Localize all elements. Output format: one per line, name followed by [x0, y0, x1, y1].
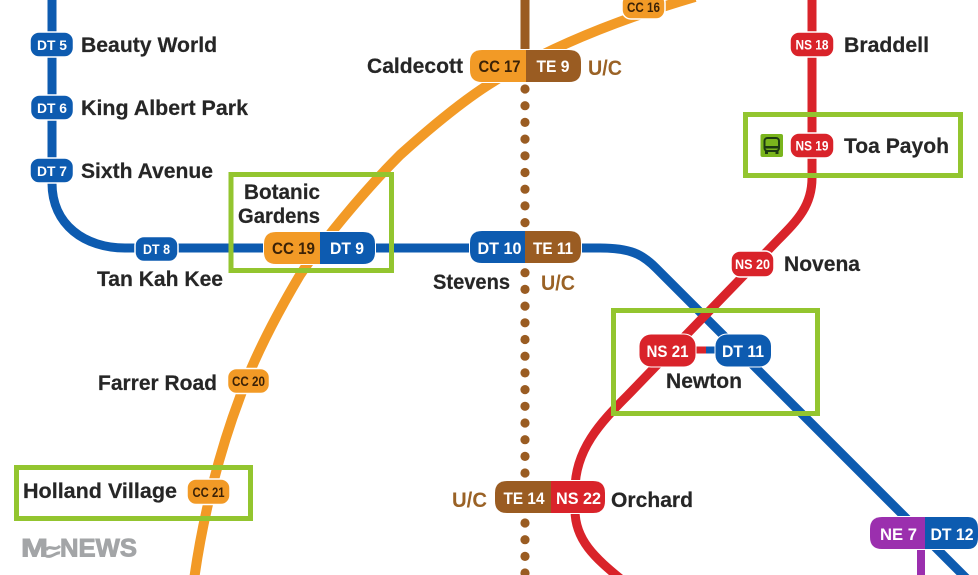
- station: Sixth Avenue: DT 7: [37, 163, 67, 179]
- station: Beauty World: [30, 32, 217, 57]
- station: Orchard: Orchard: [611, 489, 693, 512]
- highlight box: Toa Payoh: [746, 114, 960, 176]
- line: North-South (red): [575, 0, 812, 575]
- station: Caldecott: [367, 49, 622, 83]
- station: Orchard: NS 22: [556, 489, 601, 508]
- station: Orchard: [452, 480, 693, 514]
- station: Braddell: [790, 32, 929, 57]
- station: Stevens: DT 10: [478, 239, 522, 258]
- station: Beauty World: DT 5: [37, 37, 67, 53]
- station: Stevens: U/C: [541, 272, 575, 295]
- line: Thomson-East Coast (brown, solid): [520, 0, 530, 55]
- station: Botanic Gardens: Botanic: [244, 181, 320, 204]
- line: Circle (orange): [194, 0, 695, 575]
- station: Sixth Avenue: Sixth Avenue: [81, 160, 213, 183]
- station: Farrer Road: Farrer Road: [98, 372, 217, 395]
- station: Farrer Road: [98, 368, 270, 395]
- station: Beauty World: Beauty World: [81, 34, 217, 57]
- station: Caldecott: Caldecott: [367, 55, 463, 78]
- station: King Albert Park: [30, 95, 248, 120]
- icon: bus interchange: [760, 134, 783, 157]
- logo: MS News watermark: [21, 534, 137, 562]
- station: Tan Kah Kee: DT 8: [143, 241, 170, 257]
- station: Holland Village: [23, 479, 230, 504]
- station: Toa Payoh: [790, 133, 949, 158]
- highlight box: Botanic Gardens: [231, 174, 392, 270]
- station: Novena: NS 20: [735, 256, 770, 272]
- station: Newton: DT 11: [722, 342, 764, 361]
- station: King Albert Park: DT 6: [37, 100, 67, 116]
- station: Novena: Novena: [784, 253, 860, 276]
- station: Caldecott: CC 17: [478, 57, 520, 76]
- station: Stevens: [433, 230, 582, 295]
- station: Botanic Gardens: DT 9: [330, 239, 364, 258]
- station: NE 7 / DT 12 interchange: NE 7: [880, 525, 917, 544]
- station: Caldecott: U/C: [588, 57, 622, 80]
- station: Newton: [639, 334, 772, 393]
- station: Braddell: Braddell: [844, 34, 929, 57]
- station: CC 16: [622, 0, 665, 19]
- station: Newton: Newton: [666, 370, 742, 393]
- station: Braddell: NS 18: [796, 36, 829, 52]
- station: King Albert Park: King Albert Park: [81, 97, 248, 120]
- station: Newton: NS 21: [646, 342, 688, 361]
- logo: MS News watermark: NEWS: [60, 534, 137, 562]
- station: Toa Payoh: NS 19: [796, 138, 829, 154]
- station: Botanic Gardens: [238, 181, 376, 265]
- station: Tan Kah Kee: Tan Kah Kee: [97, 268, 223, 291]
- station: Botanic Gardens: CC 19: [272, 239, 315, 258]
- station: Caldecott: TE 9: [536, 57, 570, 76]
- station: NE 7 / DT 12 interchange: DT 12: [930, 525, 974, 544]
- station: Holland Village: CC 21: [192, 484, 225, 500]
- station: Toa Payoh: Toa Payoh: [844, 135, 949, 158]
- station: Botanic Gardens: Gardens: [238, 205, 320, 228]
- line: Thomson-East Coast under construction (dotted): [520, 84, 530, 575]
- station: Orchard: U/C: [452, 489, 487, 512]
- station: Holland Village: Holland Village: [23, 480, 177, 503]
- line: North-East (purple): [917, 545, 925, 575]
- station: Novena: [731, 251, 860, 277]
- logo: MS News watermark: M: [21, 534, 48, 562]
- station: Stevens: TE 11: [533, 239, 573, 258]
- station: NE 7 / DT 12 interchange: [868, 516, 978, 550]
- station: Stevens: Stevens: [433, 271, 510, 294]
- station: Orchard: TE 14: [504, 489, 545, 508]
- highlight box: Newton: [614, 310, 818, 414]
- station: Tan Kah Kee: [97, 236, 223, 291]
- highlight box: Holland Village: [16, 468, 250, 518]
- station: Sixth Avenue: [30, 158, 213, 183]
- station: Farrer Road: CC 20: [232, 373, 265, 389]
